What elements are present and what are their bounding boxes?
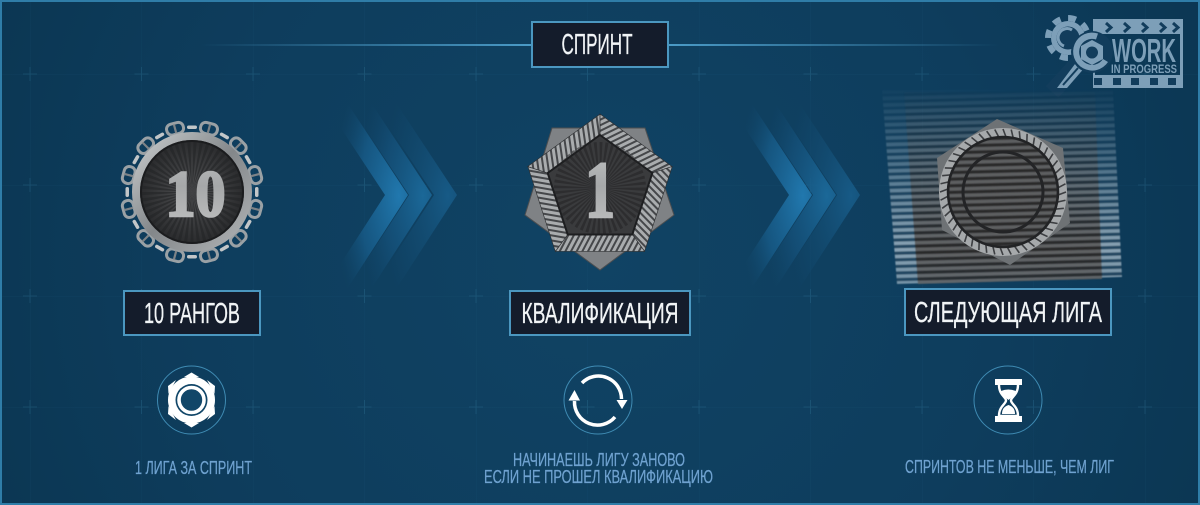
label: 10 ranks: 10 РАНГОВ	[144, 298, 240, 330]
label: qualification: КВАЛИФИКАЦИЯ	[522, 298, 678, 330]
heading: sprint: СПРИНТ	[562, 29, 633, 61]
medal: next league on ribbon	[882, 90, 1122, 284]
logo: work in progress: IN PROGRESS	[1111, 62, 1177, 76]
arrow: chevrons 2	[721, 92, 860, 300]
text: one league per sprint: 1 ЛИГА ЗА СПРИНТ	[135, 457, 252, 478]
ribbon centre	[904, 92, 1102, 284]
label: 10 ranks	[124, 291, 260, 335]
text: restart league	[484, 449, 713, 487]
ribbon	[882, 90, 1122, 284]
icon: hourglass	[974, 366, 1042, 434]
medal: 10 ranks	[118, 118, 266, 266]
icon: nut	[158, 366, 226, 434]
text: restart league: ЕСЛИ НЕ ПРОШЕЛ КВАЛИФИКАЦИЮ	[484, 466, 713, 487]
medal: qualification	[497, 98, 695, 294]
label: next league	[905, 289, 1111, 335]
logo: work in progress	[1048, 18, 1183, 92]
label: qualification	[510, 291, 690, 335]
arrow: chevrons 1	[317, 92, 457, 300]
icon: refresh	[564, 366, 632, 434]
medal: qualification: 1	[585, 147, 615, 235]
heading: sprint	[200, 22, 1000, 67]
medal: 10 ranks: 10	[166, 158, 226, 231]
label: next league: СЛЕДУЮЩАЯ ЛИГА	[914, 297, 1102, 329]
text: restart league: НАЧИНАЕШЬ ЛИГУ ЗАНОВО	[513, 449, 685, 470]
